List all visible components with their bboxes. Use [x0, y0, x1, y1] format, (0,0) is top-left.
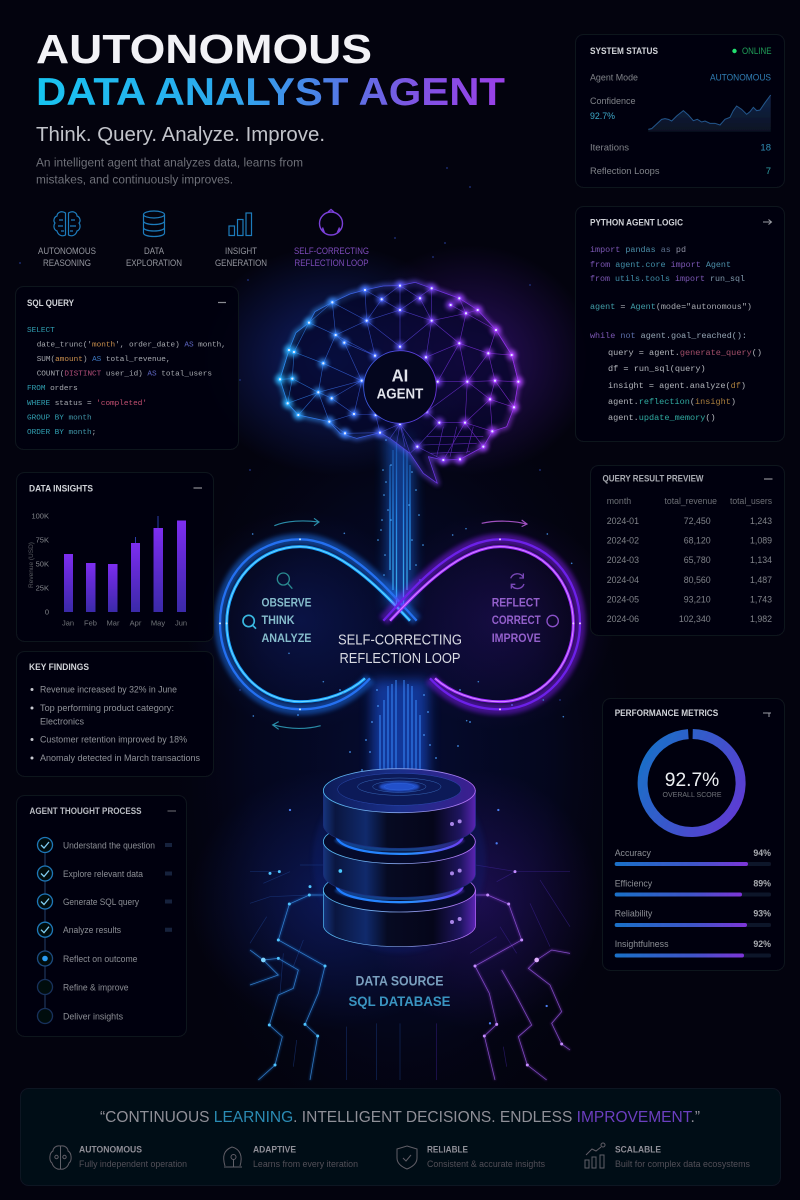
title line 2: DATA ANALYST AGENT — [36, 71, 506, 114]
hub label: AI — [392, 366, 408, 386]
icon: shield — [397, 1146, 417, 1169]
reflection loop — [220, 518, 580, 729]
month column: 2024-06 — [607, 614, 639, 624]
AI brain — [280, 282, 518, 483]
x axis labels: Apr — [130, 618, 142, 628]
left loop: blue — [220, 539, 417, 709]
right loop: purple — [383, 539, 580, 709]
y axis labels: 75K — [36, 536, 49, 544]
data beam: database to loop — [298, 680, 512, 795]
code block — [590, 245, 762, 423]
step labels: Understand the question — [63, 840, 155, 850]
code block: SUM(amount) AS total_revenue, — [37, 356, 171, 364]
step labels — [63, 840, 155, 1022]
online indicator: ONLINE — [742, 46, 772, 56]
revenue column: 102,340 — [679, 614, 711, 624]
users column: 1,134 — [750, 555, 772, 565]
network edges — [280, 286, 518, 473]
code block: df = run_sql(query) — [608, 364, 706, 374]
icon: database — [144, 211, 164, 236]
metric: efficiency — [615, 879, 771, 896]
middle disk — [323, 820, 476, 897]
title block — [36, 26, 506, 186]
item text: ADAPTIVE — [253, 1145, 296, 1155]
bottom disk — [323, 868, 476, 947]
table header: total_users — [730, 496, 773, 506]
score label: OVERALL SCORE — [662, 790, 722, 799]
icon: refresh right — [511, 573, 524, 589]
panel arrow — [763, 220, 772, 224]
item text: SCALABLE — [615, 1145, 661, 1155]
database label: DATA SOURCE — [356, 974, 444, 989]
users column: 1,243 — [750, 516, 772, 526]
icon: adaptive node — [224, 1147, 242, 1167]
data beam: brain to loop — [378, 430, 423, 608]
icon: cycle — [320, 210, 342, 235]
panel heading: PYTHON AGENT LOGIC — [590, 218, 683, 228]
right loop words: IMPROVE — [492, 631, 541, 645]
panel heading: SYSTEM STATUS — [590, 46, 658, 56]
panel: key findings — [16, 652, 214, 776]
item text: Fully independent operation — [79, 1159, 187, 1169]
pending steps — [38, 980, 52, 1024]
hub label — [377, 366, 423, 403]
loop heading: SELF-CORRECTING — [338, 632, 462, 648]
feature label — [126, 246, 182, 268]
scattered particles — [253, 529, 572, 721]
icon: brain — [54, 212, 80, 236]
code block: while not agent.goal_reached(): — [590, 331, 747, 341]
findings list: Top performing product category: — [40, 703, 174, 713]
database label — [348, 974, 450, 1009]
x axis labels: Mar — [107, 618, 120, 628]
loop heading: REFLECTION LOOP — [340, 650, 460, 667]
arrow: bottom left — [273, 722, 321, 729]
code block: ORDER BY month; — [27, 429, 96, 437]
SQL database — [313, 740, 486, 953]
circuit traces — [250, 810, 570, 1080]
item text — [427, 1145, 546, 1169]
feature label: AUTONOMOUS — [38, 246, 96, 256]
findings list: Revenue increased by 32% in June — [40, 685, 177, 695]
metric: reliability: 93% — [753, 909, 771, 919]
code block — [27, 327, 226, 437]
feature label: REFLECTION LOOP — [294, 258, 369, 268]
panel dash — [218, 302, 226, 304]
completed steps — [38, 838, 52, 937]
panel heading: QUERY RESULT PREVIEW — [602, 474, 704, 484]
sparkline chart — [648, 95, 771, 132]
metric: efficiency: 89% — [753, 879, 771, 889]
confidence: 92.7% — [590, 111, 616, 122]
agent mode row: AUTONOMOUS — [710, 73, 771, 83]
panel: system status — [576, 34, 784, 188]
agent mode row: Agent Mode — [590, 73, 638, 83]
item text: Built for complex data ecosystems — [615, 1159, 751, 1169]
item text — [615, 1145, 751, 1169]
icon: brain — [50, 1146, 71, 1169]
faint step icons — [165, 845, 172, 930]
score value: 92.7% — [665, 770, 719, 791]
metric: insightfulness: 92% — [753, 939, 771, 949]
y axis labels: 0 — [45, 608, 49, 616]
feature: insight generation — [215, 213, 267, 268]
metric: accuracy: Accuracy — [615, 848, 651, 858]
y axis labels: 100K — [31, 512, 49, 520]
loop labels — [262, 596, 541, 667]
code block: date_trunc('month', order_date) AS month, — [37, 342, 226, 350]
x axis labels: May — [151, 618, 165, 628]
icon: magnifier top left — [277, 573, 292, 589]
panel: agent thought process — [16, 796, 186, 1036]
panel heading: PERFORMANCE METRICS — [615, 708, 718, 718]
revenue column — [679, 516, 711, 624]
item text: Consistent & accurate insights — [427, 1159, 546, 1169]
right loop words: CORRECT — [492, 613, 541, 627]
code block: insight = agent.analyze(df) — [608, 381, 746, 391]
users column: 1,089 — [750, 536, 772, 546]
revenue column: 80,560 — [684, 575, 711, 585]
item text: Learns from every iteration — [253, 1159, 358, 1169]
feature label: SELF-CORRECTING — [294, 246, 369, 256]
left loop words: THINK — [262, 613, 295, 627]
status lights — [452, 821, 460, 922]
description — [36, 156, 303, 186]
feature: autonomous reasoning — [38, 212, 96, 268]
status light: cyan — [335, 865, 346, 876]
month column: 2024-01 — [607, 516, 639, 526]
reflection loops row: 7 — [766, 166, 771, 177]
feature label: INSIGHT — [225, 246, 258, 256]
icon: ring right — [547, 615, 558, 627]
database label: SQL DATABASE — [348, 994, 450, 1009]
online indicator — [732, 46, 772, 56]
agent mode row — [590, 73, 771, 83]
revenue column: 68,120 — [684, 536, 711, 546]
icon: magnifier left — [243, 615, 256, 629]
x axis labels: Jun — [175, 618, 187, 628]
bar chart: revenue — [28, 512, 187, 628]
connector line — [44, 853, 46, 1008]
y axis labels: 50K — [36, 560, 49, 568]
feature label: REASONING — [43, 258, 91, 268]
panel dash — [764, 478, 772, 480]
panel: python agent logic — [576, 206, 784, 442]
left loop words — [262, 596, 312, 645]
icon: growth chart — [585, 1143, 605, 1168]
panel heading: DATA INSIGHTS — [29, 484, 93, 494]
code block: SELECT — [27, 327, 55, 335]
metric: accuracy — [615, 848, 771, 866]
panel arrow — [763, 713, 771, 717]
active step — [38, 951, 52, 966]
table header — [607, 496, 773, 506]
metric: accuracy: 94% — [753, 848, 771, 858]
loop heading — [338, 632, 462, 667]
users column: 1,487 — [750, 575, 772, 585]
panel: data insights — [16, 472, 214, 642]
code block: import pandas as pd — [590, 245, 686, 255]
confidence: Confidence — [590, 96, 636, 106]
panel heading: AGENT THOUGHT PROCESS — [30, 806, 142, 816]
footer item: reliable — [397, 1145, 546, 1169]
panel heading: SQL QUERY — [27, 298, 75, 308]
feature label: DATA — [144, 246, 164, 256]
footer panel — [20, 1088, 780, 1186]
code block: from utils.tools import run_sql — [590, 274, 745, 284]
central hub — [364, 351, 436, 423]
left loop words: ANALYZE — [262, 631, 312, 645]
step labels: Refine & improve — [63, 982, 129, 992]
step labels: Deliver insights — [63, 1012, 124, 1022]
code block: WHERE status = 'completed' — [27, 400, 147, 408]
left loop words: OBSERVE — [262, 596, 312, 610]
feature icons row — [38, 210, 369, 268]
panel: SQL query — [16, 286, 238, 450]
metric: insightfulness: Insightfulness — [615, 939, 669, 949]
code block: agent = Agent(mode="autonomous") — [590, 302, 752, 312]
month column: 2024-04 — [607, 575, 639, 585]
code block: agent.reflection(insight) — [608, 397, 736, 407]
hub label: AGENT — [377, 387, 423, 403]
code block: from agent.core import Agent — [590, 260, 731, 270]
iterations row: Iterations — [590, 143, 630, 153]
tagline: Think. Query. Analyze. Improve. — [36, 123, 325, 146]
code block: COUNT(DISTINCT user_id) AS total_users — [37, 371, 212, 379]
top disk — [323, 740, 476, 848]
panel: query result preview — [590, 466, 784, 636]
code block: FROM orders — [27, 385, 78, 393]
step labels: Generate SQL query — [63, 897, 140, 907]
y axis labels — [31, 512, 49, 616]
code block: query = agent.generate_query() — [608, 348, 762, 358]
description: An intelligent agent that analyzes data, learns from — [36, 156, 303, 170]
month column — [607, 516, 639, 624]
revenue column: 72,450 — [684, 516, 711, 526]
description: mistakes, and continuously improves. — [36, 172, 233, 186]
revenue column: 93,210 — [684, 595, 711, 605]
item text: RELIABLE — [427, 1145, 468, 1155]
step labels: Explore relevant data — [63, 869, 143, 879]
feature label: GENERATION — [215, 258, 267, 268]
step labels: Analyze results — [63, 925, 122, 935]
footer item: autonomous — [50, 1145, 187, 1169]
feature: data exploration — [126, 211, 182, 268]
panel heading: KEY FINDINGS — [29, 662, 89, 672]
findings list: Electronics — [40, 717, 84, 727]
feature: self-correcting loop — [294, 210, 369, 268]
month column: 2024-05 — [607, 595, 639, 605]
feature label: EXPLORATION — [126, 258, 182, 268]
table header: month — [607, 496, 631, 506]
month column: 2024-03 — [607, 555, 639, 565]
users column — [750, 516, 772, 624]
footer quote: “CONTINUOUS LEARNING. INTELLIGENT DECISIONS. ENDLESS IMPROVEMENT.” — [100, 1109, 700, 1126]
item text: AUTONOMOUS — [79, 1145, 142, 1155]
x axis labels: Feb — [84, 618, 97, 628]
arrow: top right — [482, 520, 527, 527]
footer item: adaptive — [224, 1145, 358, 1169]
panel dash — [194, 487, 202, 489]
metric: efficiency: Efficiency — [615, 879, 653, 889]
panel: performance metrics — [602, 698, 784, 970]
revenue column: 65,780 — [684, 555, 711, 565]
reflection loops row: Reflection Loops — [590, 166, 660, 176]
y axis labels: 25K — [36, 584, 49, 592]
right loop words: REFLECT — [492, 596, 540, 610]
lower glow ring — [337, 887, 463, 902]
metric: reliability — [615, 909, 771, 927]
right loop words — [492, 596, 541, 645]
month column: 2024-02 — [607, 536, 639, 546]
code block: agent.update_memory() — [608, 413, 716, 423]
item text — [253, 1145, 358, 1169]
donut chart: overall score — [643, 734, 741, 832]
code block: GROUP BY month — [27, 415, 92, 423]
table header: total_revenue — [664, 496, 717, 506]
arrow: top left — [274, 518, 319, 526]
item text — [79, 1145, 187, 1169]
iterations row: 18 — [760, 143, 771, 154]
x axis labels — [62, 618, 187, 628]
network nodes — [280, 286, 518, 460]
feature label — [215, 246, 267, 268]
metric: insightfulness — [615, 939, 771, 958]
findings list: Customer retention improved by 18% — [40, 735, 187, 745]
step labels: Reflect on outcome — [63, 954, 138, 964]
reflection loops row — [590, 166, 771, 177]
users column: 1,743 — [750, 595, 772, 605]
feature label — [294, 246, 369, 268]
iterations row — [590, 143, 771, 154]
x axis labels: Jan — [62, 618, 74, 628]
panel dash — [168, 810, 176, 812]
upper glow ring — [337, 837, 463, 854]
users column: 1,982 — [750, 614, 772, 624]
metric: reliability: Reliability — [615, 909, 653, 919]
findings list: Anomaly detected in March transactions — [40, 753, 200, 763]
title line 1: AUTONOMOUS — [36, 26, 372, 72]
bars — [64, 520, 186, 612]
feature label — [38, 246, 96, 268]
findings list — [32, 685, 200, 763]
footer item: scalable — [585, 1143, 751, 1169]
results table — [607, 496, 773, 624]
icon: bar chart — [229, 213, 252, 236]
confidence — [590, 96, 636, 122]
y axis title: Revenue (USD) — [28, 542, 35, 588]
bar spikes — [136, 516, 158, 543]
